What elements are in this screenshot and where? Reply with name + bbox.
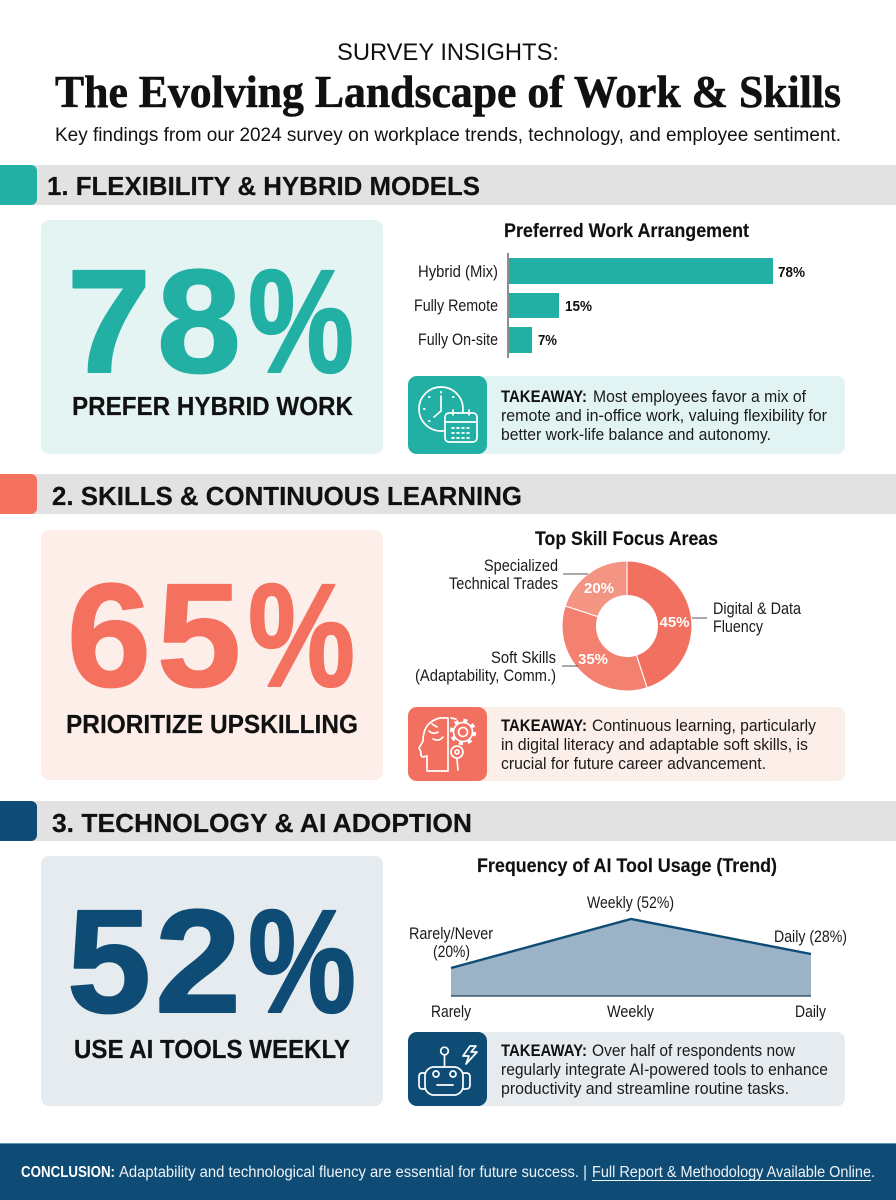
area chart: AI tool usage: Weekly <box>607 1003 655 1021</box>
callout: takeaway 3: regularly integrate AI-powered tools to enhance <box>501 1061 828 1079</box>
panel: 52% AI stat <box>41 856 383 1106</box>
donut chart: top skill focus areas <box>415 528 802 691</box>
callout: takeaway 3: TAKEAWAY: <box>501 1042 587 1060</box>
bar chart: preferred work arrangement: 7% <box>538 332 557 349</box>
section 2 heading: 2. SKILLS & CONTINUOUS LEARNING <box>52 481 522 511</box>
area chart: AI tool usage: Daily (28%) <box>774 928 847 946</box>
icon: head with gears <box>419 718 474 771</box>
footer: conclusion: Full Report & Methodology Available Online <box>592 1164 871 1181</box>
icon: robot with lightning bolt <box>419 1046 477 1095</box>
bar chart: preferred work arrangement <box>414 220 805 358</box>
panel: 65% upskilling stat: 5 <box>157 554 241 718</box>
area chart: AI tool usage: Frequency of AI Tool Usage (Trend) <box>477 855 777 877</box>
panel: 65% upskilling stat: 6 <box>67 554 151 718</box>
section 1 heading <box>0 165 896 205</box>
donut chart: top skill focus areas: Fluency <box>713 618 764 636</box>
footer: conclusion: Adaptability and technological fluency are essential for future success. | <box>119 1164 587 1181</box>
callout: takeaway 2 <box>408 707 845 781</box>
kicker: SURVEY INSIGHTS: <box>337 39 559 66</box>
callout: takeaway 1: remote and in-office work, valuing flexibility for <box>501 407 827 425</box>
donut segments <box>562 561 692 691</box>
panel: 78% hybrid stat: PREFER HYBRID WORK <box>72 391 353 421</box>
section 2 heading <box>0 474 896 514</box>
area chart: AI tool usage: Rarely/Never <box>409 925 493 943</box>
panel: 65% upskilling stat <box>41 530 383 780</box>
area chart: AI tool usage <box>409 855 847 1021</box>
callout: takeaway 1 <box>408 376 845 454</box>
callout: takeaway 1: Most employees favor a mix of <box>593 388 806 406</box>
donut chart: top skill focus areas: Digital & Data <box>713 600 802 618</box>
bar chart: preferred work arrangement: Fully Remote <box>414 297 498 315</box>
bar chart: preferred work arrangement: 78% <box>778 264 805 281</box>
callout: takeaway 3: productivity and streamline routine tasks. <box>501 1080 789 1098</box>
callout: takeaway 3 <box>408 1032 845 1106</box>
area chart: AI tool usage: Weekly (52%) <box>587 894 674 912</box>
donut chart: top skill focus areas: 20% <box>584 580 614 597</box>
panel: 78% hybrid stat: % <box>248 240 354 404</box>
bar chart: preferred work arrangement: Hybrid (Mix) <box>418 263 498 281</box>
area chart: AI tool usage: Rarely <box>431 1003 472 1021</box>
callout: takeaway 3: Over half of respondents now <box>592 1042 795 1060</box>
panel: 52% AI stat: % <box>248 880 356 1044</box>
section 3 heading: 3. TECHNOLOGY & AI ADOPTION <box>52 808 472 838</box>
panel: 65% upskilling stat: PRIORITIZE UPSKILLING <box>66 709 358 739</box>
panel: 78% hybrid stat: 7 <box>67 240 151 404</box>
panel: 52% AI stat: USE AI TOOLS WEEKLY <box>74 1034 350 1064</box>
donut chart: top skill focus areas: Soft Skills <box>491 649 556 667</box>
callout: takeaway 2: in digital literacy and adaptable soft skills, is <box>501 736 808 754</box>
footer: conclusion: CONCLUSION: <box>21 1164 115 1181</box>
subtitle: Key findings from our 2024 survey on workplace trends, technology, and employee sentiment. <box>55 124 841 146</box>
callout: takeaway 2: Continuous learning, particularly <box>592 717 817 735</box>
donut chart: top skill focus areas: Top Skill Focus Areas <box>535 528 718 550</box>
area chart: AI tool usage: (20%) <box>433 943 470 961</box>
panel: 78% hybrid stat: 8 <box>157 240 241 404</box>
callout: takeaway 1: TAKEAWAY: <box>501 388 587 406</box>
panel: 52% AI stat: 2 <box>155 880 241 1044</box>
panel: 78% hybrid stat <box>41 220 383 454</box>
callout: takeaway 2: TAKEAWAY: <box>501 717 587 735</box>
donut chart: top skill focus areas: Specialized <box>484 557 558 575</box>
section 1 heading: 1. FLEXIBILITY & HYBRID MODELS <box>47 171 480 201</box>
donut chart: top skill focus areas: (Adaptability, Comm.) <box>415 667 556 685</box>
area chart: AI tool usage: Daily <box>795 1003 827 1021</box>
callout: takeaway 1: better work-life balance and autonomy. <box>501 426 771 444</box>
panel: 52% AI stat: 5 <box>67 880 151 1044</box>
panel: 65% upskilling stat: % <box>248 554 355 718</box>
icon: clock and calendar <box>419 387 477 442</box>
donut chart: top skill focus areas: Technical Trades <box>449 575 558 593</box>
footer: conclusion: . <box>871 1164 875 1181</box>
footer: conclusion <box>0 1143 896 1200</box>
donut chart: top skill focus areas: 45% <box>659 614 690 631</box>
title: The Evolving Landscape of Work & Skills <box>55 66 841 117</box>
section 3 heading <box>0 801 896 841</box>
donut chart: top skill focus areas: 35% <box>578 651 608 668</box>
bar chart: preferred work arrangement: Fully On-site <box>418 331 498 349</box>
callout: takeaway 2: crucial for future career advancement. <box>501 755 766 773</box>
header <box>55 39 841 146</box>
bar chart: preferred work arrangement: Preferred Work Arrangement <box>504 220 749 242</box>
bar chart: preferred work arrangement: 15% <box>565 298 592 315</box>
